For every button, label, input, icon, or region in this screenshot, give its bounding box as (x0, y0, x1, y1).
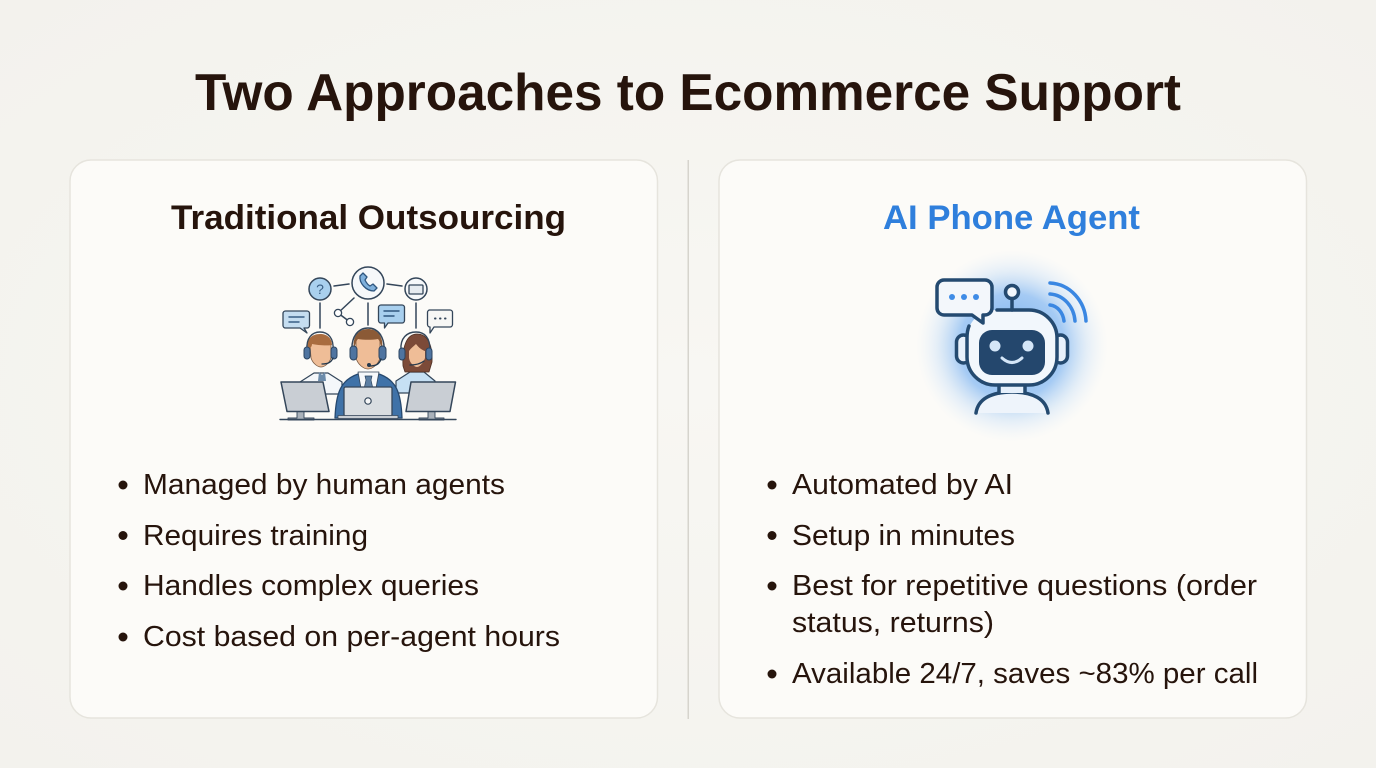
list: traditional outsourcing points (118, 469, 560, 653)
list: ai phone agent points: Setup in minutes (792, 520, 1015, 552)
title: Two Approaches to Ecommerce Support (195, 64, 1181, 122)
list: traditional outsourcing points: Requires training (143, 520, 368, 552)
icon: call centre agents (280, 267, 456, 420)
list: ai phone agent points (768, 469, 1258, 690)
icon: ai robot (916, 250, 1108, 442)
monitors and laptop (280, 382, 456, 420)
panel: traditional outsourcing (70, 160, 658, 718)
list: ai phone agent points: status, returns) (792, 607, 994, 639)
centre agent (335, 328, 402, 418)
list: ai phone agent points: Best for repetitive questions (order (792, 570, 1257, 602)
right agent (396, 332, 435, 393)
speech bubble (937, 280, 992, 323)
list: ai phone agent points: Automated by AI (792, 469, 1013, 501)
wifi waves (1050, 283, 1086, 321)
heading: traditional outsourcing: Traditional Outsourcing (171, 199, 566, 237)
list: traditional outsourcing points: Managed by human agents (143, 469, 505, 501)
left agent (300, 332, 342, 394)
list: traditional outsourcing points: Handles complex queries (143, 570, 479, 602)
list: ai phone agent points: Available 24/7, saves ~83% per call (792, 658, 1258, 690)
panel: ai phone agent (719, 160, 1306, 718)
icon: call centre agents: ? (316, 281, 324, 297)
list: traditional outsourcing points: Cost based on per-agent hours (143, 621, 560, 653)
heading: ai phone agent: AI Phone Agent (883, 199, 1140, 237)
